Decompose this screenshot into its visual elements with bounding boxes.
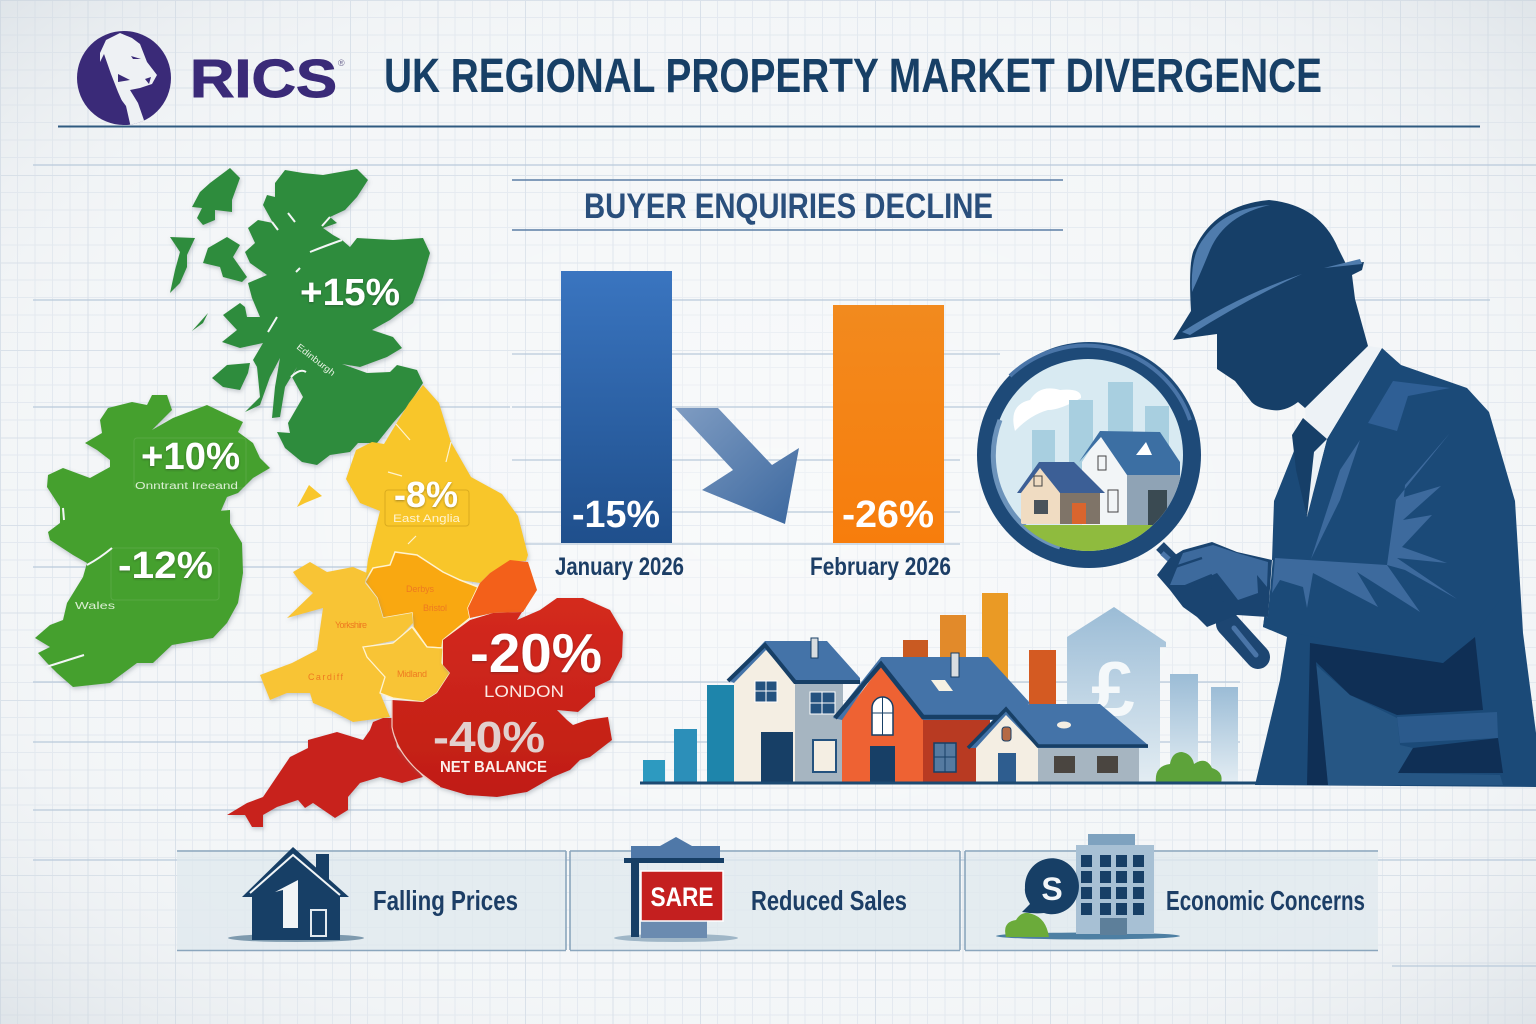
label: Edinburgh: Edinburgh: [295, 342, 337, 378]
value: -40% net balance: -40%: [433, 713, 545, 762]
registered mark: ®: [338, 58, 345, 68]
magnifying glass handle: [1160, 546, 1258, 657]
label: Ireland: Onntrant Ireeand: [135, 481, 238, 492]
ghost house with pound sign: £: [1091, 645, 1135, 733]
small regional labels: [308, 584, 447, 682]
label: London: LONDON: [484, 682, 564, 701]
label: reduced sales: Reduced Sales: [751, 885, 907, 916]
surveyor figure: [977, 200, 1536, 787]
ground line: [640, 782, 1260, 784]
house: left: [728, 638, 860, 782]
small regional labels: Derbys: [406, 584, 434, 594]
region: Wales: [260, 562, 413, 722]
lens scene: [1013, 382, 1180, 551]
map of UK and Ireland: [35, 168, 623, 827]
bush: [1156, 752, 1222, 783]
icon: sale sign: SARE: [650, 882, 714, 912]
region: East Anglia: [468, 560, 537, 618]
RICS wordmark: RICS: [190, 49, 337, 109]
bar: February: [833, 305, 944, 543]
region: South West: [227, 718, 423, 827]
icon: sale sign: [614, 837, 738, 942]
housing street scene: [640, 593, 1260, 783]
label: falling prices: Falling Prices: [373, 885, 518, 916]
region: South Midlands: [363, 627, 450, 702]
header: [77, 31, 345, 128]
small regional labels: Bristol: [423, 603, 447, 613]
small regional labels: Midland: [397, 669, 427, 679]
bar: January: [561, 271, 672, 543]
bar chart: buyer enquiries: [512, 180, 1063, 581]
label boxes: [111, 438, 469, 600]
value: January -15%: -15%: [572, 494, 660, 536]
region: Midlands: [365, 552, 478, 648]
region: Isle of Man: [297, 485, 322, 507]
small regional labels: Yorkshire: [335, 620, 367, 630]
value: February -26%: -26%: [842, 494, 934, 536]
value: -12%: -12%: [118, 545, 213, 587]
jacket: [1255, 346, 1536, 787]
ghost house with pound sign: [1067, 607, 1166, 783]
label: January 2026: January 2026: [555, 553, 684, 581]
label: net balance: NET BALANCE: [440, 759, 547, 776]
value: -8%: -8%: [394, 474, 458, 515]
value: Scotland +15%: +15%: [300, 272, 400, 314]
panel: economic concerns: [965, 834, 1378, 951]
arrow: decline: [675, 408, 799, 524]
panels row: [177, 834, 1378, 951]
region: Scotland: [170, 168, 430, 465]
panel: reduced sales: [570, 837, 960, 951]
chart heading: BUYER ENQUIRIES DECLINE: [584, 187, 993, 226]
label: East Anglia: East Anglia: [393, 513, 461, 525]
magnifying glass: [977, 342, 1201, 568]
icon: house: [228, 847, 364, 942]
region: London and South East: [392, 598, 623, 797]
small regional labels: Cardiff: [308, 672, 343, 682]
region: Northern England: [346, 385, 528, 583]
label: February 2026: February 2026: [810, 553, 951, 581]
label: Wales: Wales: [75, 601, 115, 612]
RICS logo: [77, 31, 337, 128]
region: Ireland: [35, 395, 270, 687]
head and helmet silhouette: [1173, 200, 1368, 410]
value: +10%: +10%: [141, 436, 240, 478]
title: UK REGIONAL PROPERTY MARKET DIVERGENCE: [384, 50, 1322, 103]
icon: building with speech bubble: [996, 834, 1180, 940]
hand: [1157, 542, 1272, 627]
icon: building with speech bubble: S: [1041, 871, 1063, 907]
rising bars: [643, 593, 1238, 783]
house: right small: [968, 704, 1148, 782]
label: economic concerns: Economic Concerns: [1166, 885, 1365, 916]
house: middle red: [833, 653, 1030, 782]
panel: falling prices: [177, 847, 566, 951]
helmet highlights: [1182, 205, 1362, 335]
value: London -20%: -20%: [470, 622, 602, 684]
